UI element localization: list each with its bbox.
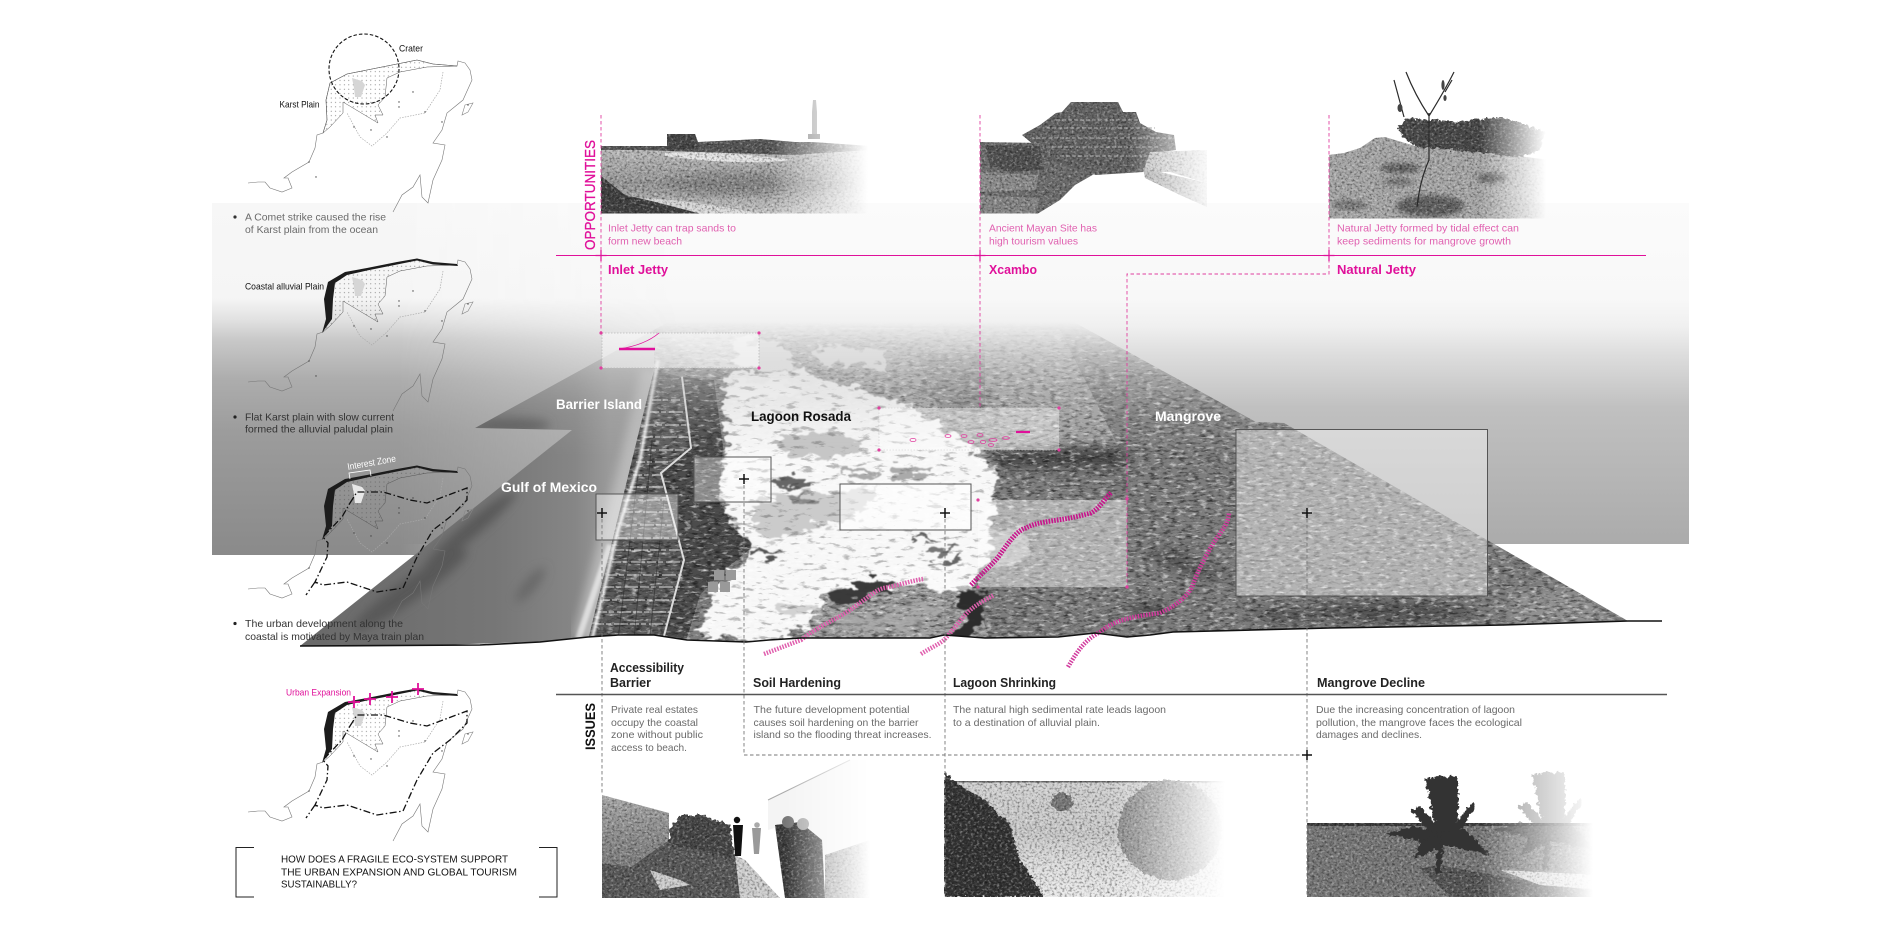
opportunity: inlet jetty text: Inlet Jetty can trap sands to (608, 222, 736, 234)
opportunities axis line (556, 250, 1646, 261)
map 1: crater and karst plain (248, 34, 473, 212)
photo: accessibility barrier (602, 760, 870, 898)
photo: mangrove decline (1307, 772, 1600, 897)
label: urban expansion: Urban Expansion (286, 688, 351, 698)
issue: lagoon shrinking (953, 675, 1166, 729)
label: karst plain: Karst Plain (280, 100, 320, 110)
issue: accessibility barrier: Accessibility (610, 660, 685, 675)
issue: soil hardening: island so the flooding threat increases. (754, 729, 932, 741)
opportunity: natural jetty text (1337, 222, 1519, 277)
surf line (578, 360, 658, 640)
map 4: urban expansion (248, 683, 473, 841)
opportunity: natural jetty text: Natural Jetty formed by tidal effect can (1337, 222, 1519, 234)
callout overlay: accessibility barrier box (596, 494, 678, 540)
pink dashed boundary: central curve (921, 595, 994, 654)
place label: gulf of mexico: Gulf of Mexico (501, 480, 597, 495)
issues axis line (556, 694, 1667, 696)
issue: soil hardening: The future development potential (754, 704, 910, 716)
pink dashed boundary: lagoon curve (764, 579, 923, 654)
opportunity: natural jetty text: keep sediments for mangrove growth (1337, 236, 1511, 248)
callout overlay: xcambo box (877, 406, 1061, 452)
lagoon water and dark patches (749, 433, 984, 640)
urban expansion markers (348, 683, 424, 708)
text: comet strike note: of Karst plain from the ocean (245, 224, 378, 236)
issue: accessibility barrier (610, 660, 703, 754)
opportunity: xcambo text: Xcambo (989, 262, 1037, 277)
callout overlay: lagoon shrinking box (840, 484, 971, 530)
callout: research question with brackets: THE URBAN EXPANSION AND GLOBAL TOURISM (281, 866, 517, 878)
issue: mangrove decline: pollution, the mangrove faces the ecological (1316, 717, 1522, 729)
issue: mangrove decline: Mangrove Decline (1317, 675, 1425, 690)
barrier island urban strips (595, 377, 691, 640)
issue: accessibility barrier: access to beach. (611, 742, 687, 754)
callout overlay: inlet jetty box (599, 331, 761, 370)
text: comet strike note: A Comet strike caused the rise (245, 212, 386, 224)
subdivided plots (708, 570, 736, 592)
callout: research question with brackets: HOW DOES A FRAGILE ECO-SYSTEM SUPPORT (281, 854, 509, 866)
text: flat karst note: formed the alluvial paludal plain (245, 424, 393, 436)
place label: barrier island: Barrier Island (556, 397, 642, 412)
callout overlay: mangrove decline box (1236, 430, 1488, 596)
callout overlay: natural jetty box (976, 497, 1129, 589)
issue: mangrove decline: damages and declines. (1316, 729, 1422, 741)
map 2: coastal alluvial plain (248, 258, 473, 411)
issue: lagoon shrinking: to a destination of alluvial plain. (953, 717, 1100, 729)
issue: soil hardening: causes soil hardening on the barrier (754, 717, 919, 729)
issue: accessibility barrier: Barrier (610, 675, 651, 690)
issue: soil hardening: Soil Hardening (753, 675, 841, 690)
opportunities guide lines (601, 115, 1329, 587)
label: crater: Crater (399, 44, 423, 54)
map 3: interest zone and train plan (248, 454, 473, 618)
panel: misty sky backdrop (212, 203, 1689, 555)
place label: lagoon rosada: Lagoon Rosada (751, 409, 851, 424)
pink dashed boundary: mangrove curve (1068, 513, 1229, 667)
issue: mangrove decline (1316, 675, 1522, 741)
opportunity: inlet jetty text: Inlet Jetty (608, 262, 669, 277)
callout: research question with brackets: SUSTAINABLLY? (281, 878, 357, 890)
clean bright lagoon flats (700, 340, 1030, 640)
opportunity: xcambo text (989, 222, 1097, 277)
opportunity: inlet jetty text (608, 222, 736, 277)
heading: issues: ISSUES (582, 703, 598, 750)
issue: accessibility barrier: Private real estates (611, 704, 698, 716)
opportunity: xcambo text: high tourism values (989, 236, 1078, 248)
callout: research question with brackets (236, 848, 557, 897)
gulf of mexico water (300, 346, 654, 646)
opportunity: natural jetty text: Natural Jetty (1337, 262, 1417, 277)
text: comet strike note (233, 212, 386, 236)
photo: lagoon shrinking (944, 772, 1229, 897)
lagoon blotch texture (700, 370, 1000, 640)
text: urban development note (233, 618, 424, 643)
issue: accessibility barrier: occupy the coastal (611, 717, 698, 729)
issue: mangrove decline: Due the increasing concentration of lagoon (1316, 704, 1515, 716)
pink dashed boundary: natural jetty curve (971, 493, 1111, 585)
opportunity: xcambo text: Ancient Mayan Site has (989, 222, 1097, 234)
heading: opportunities: OPPORTUNITIES (583, 140, 599, 250)
terrain section line (300, 621, 1662, 646)
text: urban development note: coastal is motivated by Maya train plan (245, 631, 424, 643)
markers: crosshairs at issue boxes (597, 474, 1312, 760)
text: urban development note: The urban development along the (245, 618, 403, 630)
callout overlay: soil hardening box (694, 457, 771, 502)
issue: soil hardening (753, 675, 932, 741)
textured land base (588, 316, 1640, 650)
text: flat karst note (233, 412, 394, 436)
place label: mangrove: Mangrove (1155, 409, 1222, 424)
label: coastal alluvial plain: Coastal alluvial Plain (245, 282, 324, 292)
photo: natural jetty (1329, 72, 1550, 218)
panel: aerial perspective of the coastal ground (290, 310, 1640, 650)
issue: lagoon shrinking: The natural high sedimental rate leads lagoon (953, 704, 1166, 716)
opportunity: inlet jetty text: form new beach (608, 236, 682, 248)
label: interest zone: Interest Zone (347, 454, 397, 473)
issue: accessibility barrier: zone without public (611, 729, 703, 741)
photo: xcambo pyramid (980, 102, 1207, 214)
text: flat karst note: Flat Karst plain with slow current (245, 412, 394, 424)
issues guide lines (602, 479, 1307, 897)
issue: lagoon shrinking: Lagoon Shrinking (953, 675, 1056, 690)
photo: inlet jetty (601, 100, 870, 214)
